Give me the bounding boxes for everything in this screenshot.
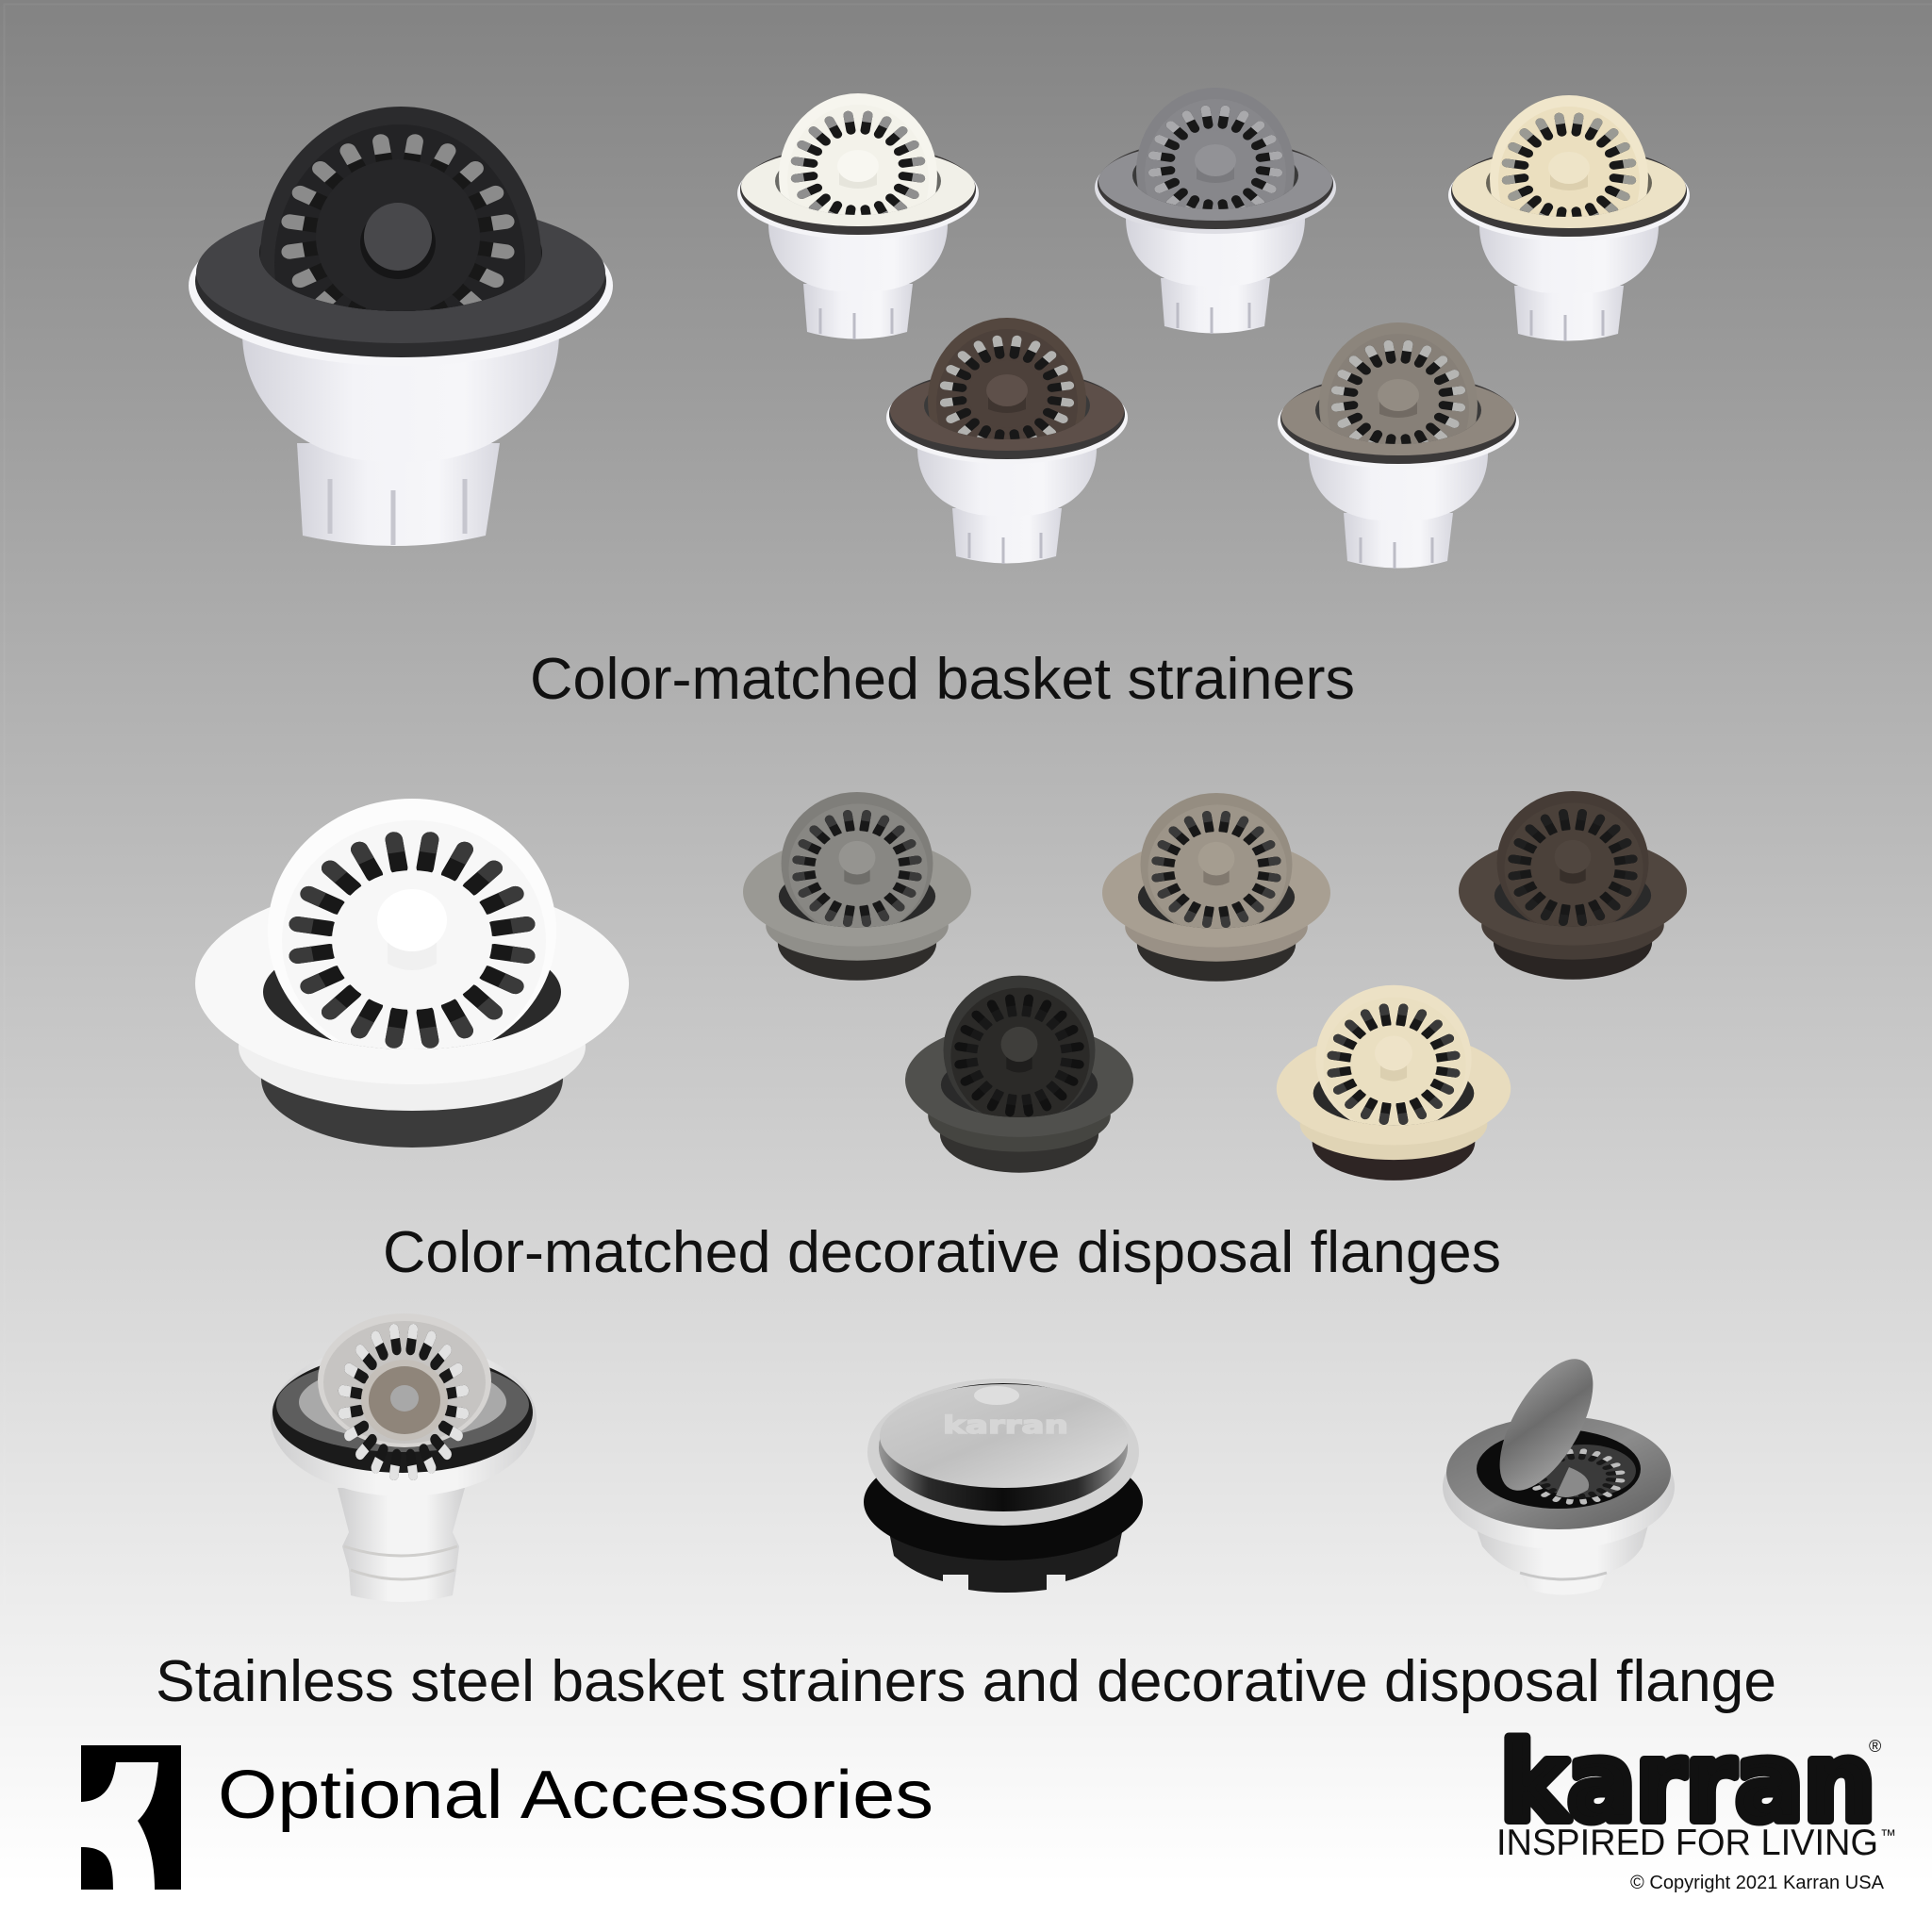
- small gray basket strainer: [1095, 88, 1336, 334]
- heading: color-matched basket strainers: Color-matched basket strainers: [530, 647, 1355, 712]
- small taupe disposal flange: [1102, 793, 1330, 982]
- stainless steel strainer with pivoting lid: [1443, 1345, 1675, 1595]
- small beige disposal flange: [1277, 985, 1511, 1181]
- logo: Karran wordmark with tagline: [1496, 1720, 1896, 1893]
- small taupe basket strainer: [1278, 322, 1519, 569]
- embossed karran mark: karran: [943, 1412, 1068, 1440]
- tagline: INSPIRED FOR LIVING: [1496, 1823, 1878, 1863]
- panel: color-matched disposal flanges: [195, 791, 1687, 1181]
- small brown disposal flange: [1459, 791, 1687, 980]
- panel: color-matched basket strainers: [189, 88, 1690, 569]
- large black basket strainer: [189, 107, 613, 546]
- icon: Karran K mark: [81, 1745, 181, 1890]
- wordmark: karran: [1500, 1720, 1875, 1846]
- title: Optional Accessories: Optional Accessories: [218, 1758, 933, 1833]
- stainless steel basket strainer: [271, 1313, 537, 1602]
- small black disposal flange: [905, 976, 1133, 1173]
- small brown basket strainer: [886, 318, 1128, 564]
- heading: color-matched decorative disposal flanges: Color-matched decorative disposal flanges: [383, 1220, 1501, 1285]
- small cream basket strainer: [737, 93, 979, 339]
- heading: stainless steel strainers and flange: Stainless steel basket strainers and decorative disposal flange: [156, 1649, 1776, 1714]
- small beige basket strainer: [1448, 95, 1690, 341]
- large white disposal flange: [195, 799, 629, 1148]
- registered mark: ®: [1869, 1737, 1881, 1756]
- trademark: ™: [1880, 1826, 1896, 1844]
- copyright: © Copyright 2021 Karran USA: [1630, 1873, 1885, 1893]
- panel: stainless steel accessories: [271, 1313, 1675, 1602]
- small gray disposal flange: [743, 792, 971, 981]
- stainless steel disposal flange with cap: [864, 1379, 1143, 1593]
